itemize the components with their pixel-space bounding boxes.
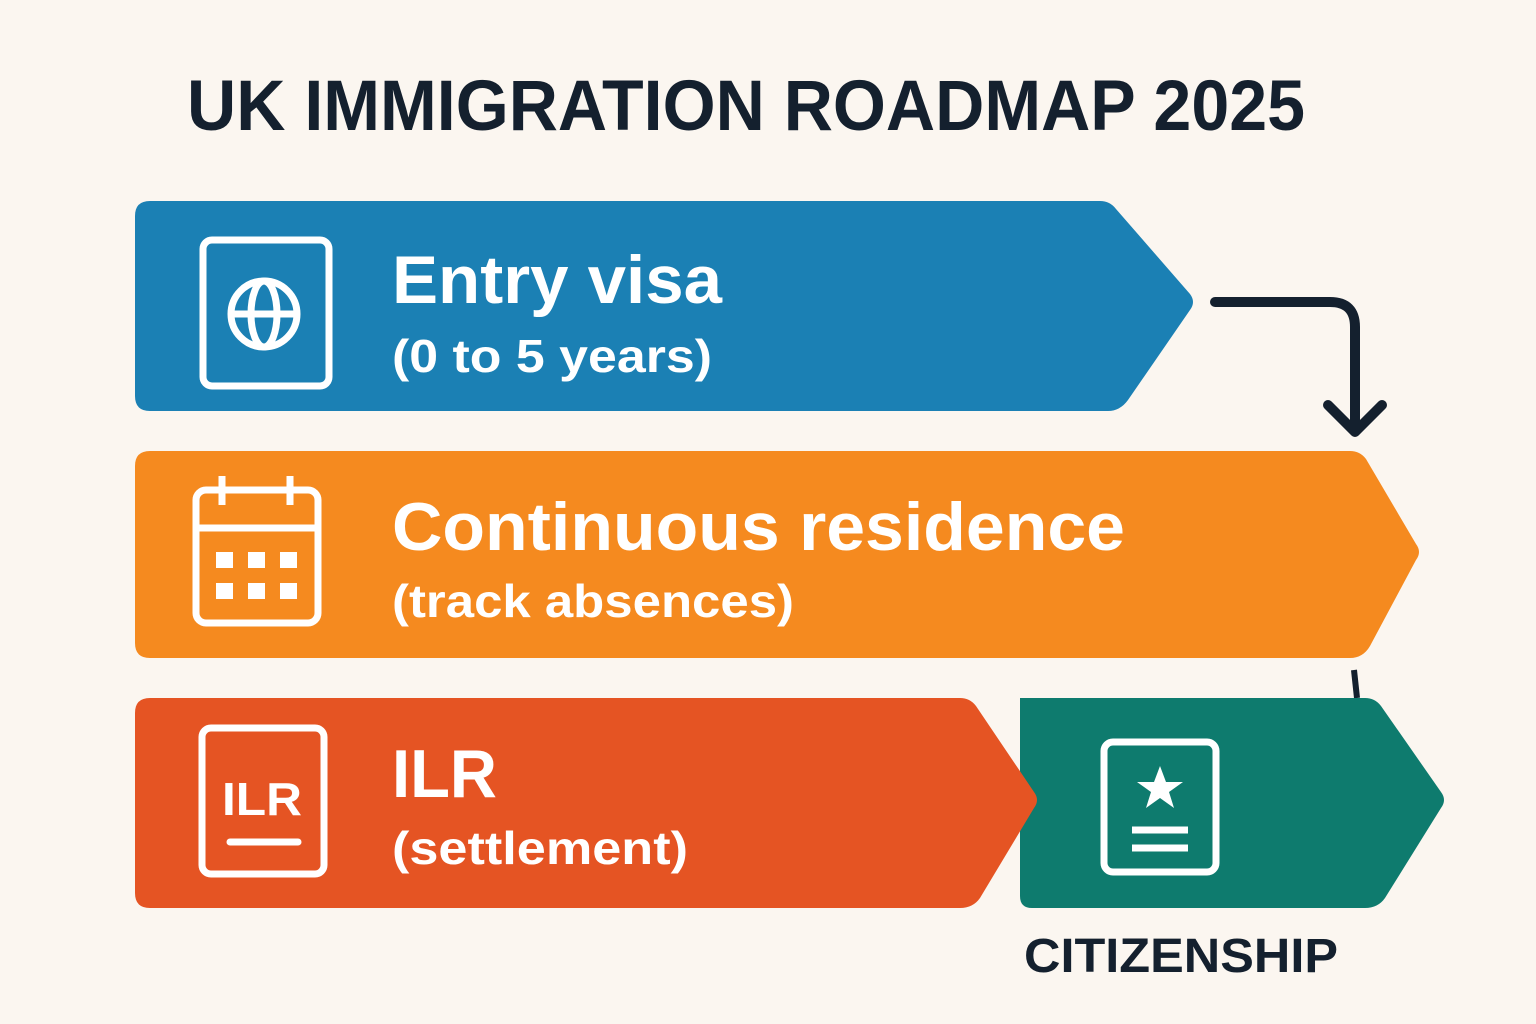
heading: continuous residence: Continuous residence xyxy=(392,489,1125,565)
panel: entry visa xyxy=(135,201,1193,411)
panel: citizenship xyxy=(1020,698,1444,908)
icon: passport globe xyxy=(203,240,329,386)
label: citizenship: CITIZENSHIP xyxy=(1024,930,1338,983)
text: years: (0 to 5 years) xyxy=(392,330,712,382)
heading: ILR: ILR xyxy=(392,736,497,812)
icon: certificate star xyxy=(1104,742,1216,872)
panel: continuous residence xyxy=(135,451,1419,658)
panel: ILR xyxy=(135,698,1037,908)
title: UK IMMIGRATION ROADMAP 2025 xyxy=(187,67,1305,146)
arrow: down connector xyxy=(1215,302,1382,432)
heading: entry visa: Entry visa xyxy=(392,242,723,318)
connector mark xyxy=(1354,670,1357,698)
text: track absences: (track absences) xyxy=(392,575,794,627)
icon: ILR document: ILR xyxy=(222,773,302,825)
icon: calendar xyxy=(196,476,318,623)
icon: ILR document xyxy=(202,728,324,874)
text: settlement: (settlement) xyxy=(392,822,688,874)
